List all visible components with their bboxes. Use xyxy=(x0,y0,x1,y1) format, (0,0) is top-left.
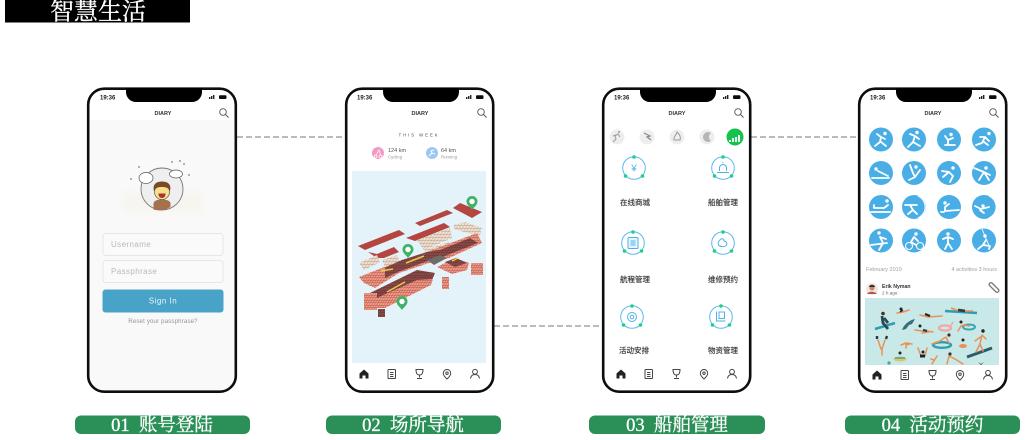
post author xyxy=(866,283,911,296)
sign in button xyxy=(102,290,224,312)
label pill 02: 02 场所导航 xyxy=(362,415,464,436)
status bar xyxy=(614,95,740,102)
phone notch xyxy=(896,88,972,102)
status bar: 19:36 xyxy=(357,96,373,102)
module: ship management: 船舶管理 xyxy=(708,197,738,207)
username field: Username xyxy=(111,240,151,249)
icon: search xyxy=(478,109,486,118)
module: repair booking xyxy=(708,230,738,284)
stat: cycling: Cycling xyxy=(388,154,403,160)
screen title: DIARY xyxy=(155,111,172,117)
phone 4: activity booking xyxy=(859,88,1006,392)
post author: Erik Nyman xyxy=(882,284,911,290)
date row xyxy=(866,267,997,273)
phone 3: ship management xyxy=(603,88,750,392)
module: activity schedule: 活动安排 xyxy=(619,345,649,355)
title banner: 智慧生活 xyxy=(50,0,146,26)
phone notch xyxy=(640,88,716,102)
stat: running: Running xyxy=(441,154,458,160)
date row: 4 activities 3 hours xyxy=(951,267,997,273)
module: repair booking: 维修预约 xyxy=(708,274,738,284)
module: voyage management xyxy=(620,230,650,284)
module: voyage management: 航程管理 xyxy=(620,274,650,284)
passphrase field xyxy=(103,260,223,282)
label pill 04 xyxy=(845,415,1020,436)
title banner xyxy=(5,0,190,26)
status bar: 19:36 xyxy=(100,96,116,102)
module: online store: ¥ xyxy=(630,164,637,174)
label pill 01 xyxy=(75,415,250,436)
module: supplies management: 物资管理 xyxy=(708,345,738,355)
module: online store xyxy=(620,155,650,207)
phone notch xyxy=(383,88,459,102)
map panel xyxy=(352,171,486,363)
status bar xyxy=(357,95,484,102)
status bar: 19:36 xyxy=(614,96,630,102)
module: online store: 在线商城 xyxy=(620,197,650,207)
phone 1: account login xyxy=(88,88,236,392)
sign in button: Sign In xyxy=(149,296,177,306)
username field xyxy=(103,234,223,256)
module: ship management xyxy=(708,155,738,207)
sport icon grid xyxy=(869,128,996,252)
module: supplies management xyxy=(708,304,738,355)
stat: running xyxy=(426,147,458,160)
icon: search xyxy=(220,109,228,118)
screen title: DIARY xyxy=(412,111,429,117)
status bar: 19:36 xyxy=(870,96,886,102)
screen title: DIARY xyxy=(925,111,942,117)
label pill 04: 04 活动预约 xyxy=(882,415,983,436)
dashed connector: ship management to activities xyxy=(751,136,858,138)
date row: February 2019 xyxy=(866,267,902,273)
category icon row xyxy=(610,128,744,146)
phone notch xyxy=(126,88,202,102)
stat: cycling: 124 km xyxy=(388,148,406,154)
post author: 2 h ago xyxy=(882,290,898,296)
avatar illustration xyxy=(122,160,202,212)
label pill 02 xyxy=(326,415,501,436)
label pill 03 xyxy=(589,415,765,436)
map pins xyxy=(396,196,478,310)
stat: running: 64 km xyxy=(441,148,456,154)
screen title: DIARY xyxy=(669,111,686,117)
reset link: Reset your passphrase? xyxy=(128,319,198,325)
dashed connector: login to navigation xyxy=(237,136,345,138)
this week heading: THIS WEEK xyxy=(399,132,439,138)
tab bar xyxy=(872,370,992,380)
passphrase field: Passphrase xyxy=(111,267,157,276)
status bar xyxy=(870,95,996,102)
icon: search xyxy=(735,109,744,118)
label pill 01: 01 账号登陆 xyxy=(111,415,213,436)
stat: cycling xyxy=(372,147,406,160)
swimmers illustration xyxy=(865,298,999,365)
phone 2: venue navigation xyxy=(346,88,493,392)
tab bar xyxy=(360,369,480,379)
status bar xyxy=(100,95,226,102)
exploded isometric building map xyxy=(358,203,483,317)
icon: paper clip xyxy=(989,283,999,292)
icon: search xyxy=(990,109,998,118)
dashed connector: navigation to ship management xyxy=(494,325,602,327)
module: activity schedule xyxy=(619,304,649,355)
label pill 03: 03 船舶管理 xyxy=(626,415,728,436)
tab bar xyxy=(616,369,736,379)
